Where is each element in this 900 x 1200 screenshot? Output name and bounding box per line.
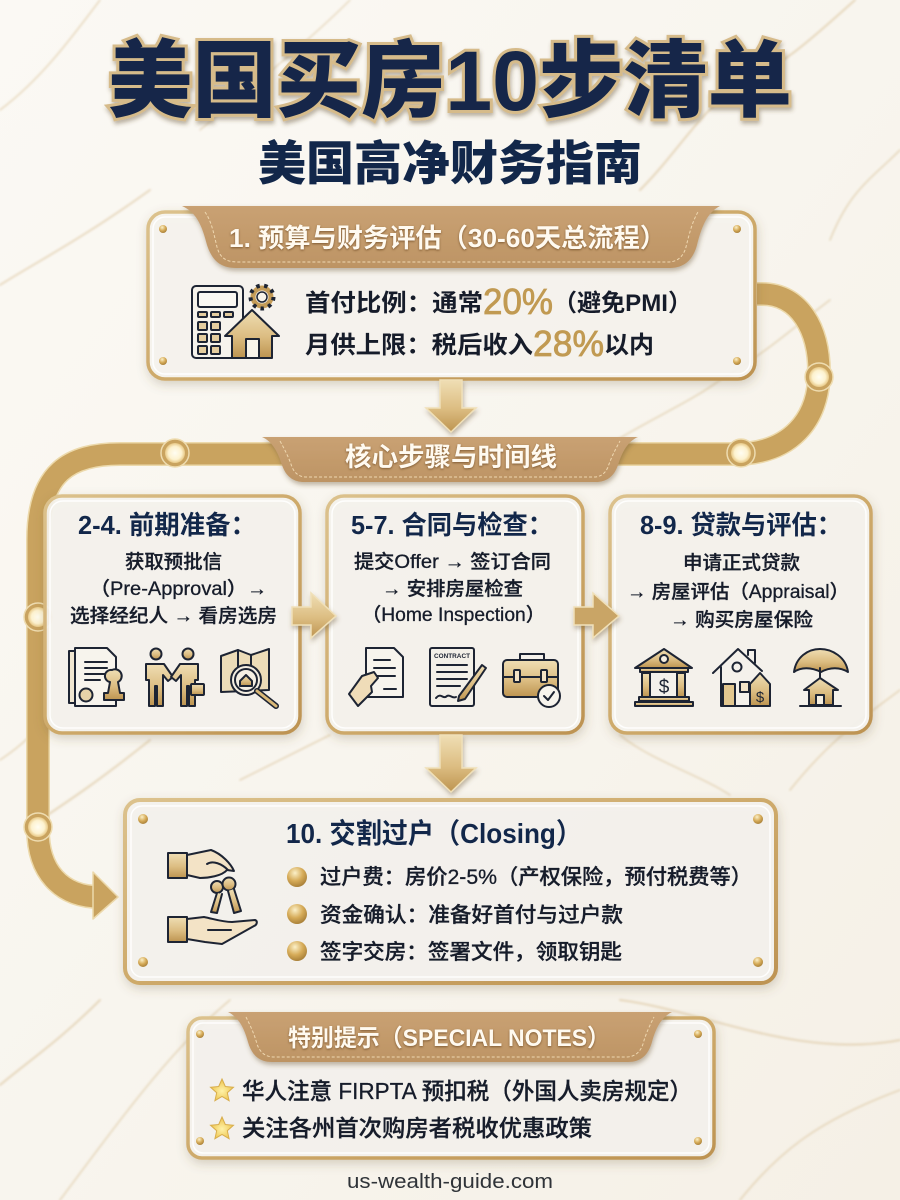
budget text: down payment <box>305 281 692 322</box>
body text: → 购买房屋保险 <box>670 609 813 631</box>
title: 美国买房10步清单 <box>108 34 792 128</box>
icon: house with price tag: $ <box>756 689 765 706</box>
body text: （Home Inspection） <box>362 604 545 626</box>
subtitle: 美国高净财务指南 <box>258 137 642 190</box>
header tab: core steps <box>262 437 638 482</box>
panel: steps 2-4 <box>45 496 300 733</box>
heading: 5-7. 合同与检查： <box>351 510 553 540</box>
budget text: down payment: （避免PMI） <box>553 290 692 317</box>
icon: handshake people <box>146 648 204 706</box>
panel: step 1 budget <box>148 206 755 379</box>
icon: bank <box>635 649 693 706</box>
body text <box>70 551 277 627</box>
heading: 8-9. 贷款与评估： <box>640 510 842 540</box>
arrow: steps 5-7 to 8-9 <box>574 593 619 638</box>
arrow: down to core steps <box>426 380 476 432</box>
header tab: step 1 <box>182 206 720 268</box>
header tab: special notes <box>228 1012 672 1062</box>
body text <box>627 552 849 631</box>
body text: 选择经纪人 → 看房选房 <box>70 605 277 627</box>
arrow: steps 2-4 to 5-7 <box>292 593 336 638</box>
bullet list: 资金确认：准备好首付与过户款 <box>320 904 623 927</box>
icon: signed contract with pen: CONTRACT <box>434 653 470 660</box>
arrow: down to closing <box>426 735 476 792</box>
arrow: into closing panel <box>93 872 118 919</box>
budget text: down payment: 首付比例：通常 <box>305 290 483 317</box>
icon: briefcase with check <box>503 654 560 707</box>
budget text: monthly payment: 以内 <box>604 332 654 359</box>
icon: umbrella over house <box>794 649 848 706</box>
icon: signed contract with pen <box>430 648 486 706</box>
connector: gold timeline path <box>38 294 819 897</box>
bullet list: 过户费：房价2-5%（产权保险，预付税费等） <box>320 866 752 889</box>
icon: certificate and stamp <box>69 648 124 706</box>
budget text: down payment: 20% <box>483 281 553 322</box>
node markers on timeline <box>24 363 833 841</box>
icon: calculator with gear and house <box>192 286 279 358</box>
note 1: 华人注意 FIRPTA 预扣税（外国人卖房规定） <box>242 1078 692 1104</box>
heading: 10. 交割过户（Closing） <box>286 818 582 849</box>
body text: 申请正式贷款 <box>683 552 800 574</box>
budget text: monthly payment: 28% <box>533 323 604 364</box>
header tab: step 1: 1. 预算与财务评估（30-60天总流程） <box>229 223 666 253</box>
body text: （Pre-Approval）→ <box>90 578 267 600</box>
budget text: monthly payment: 月供上限：税后收入 <box>305 332 533 359</box>
bullet list <box>287 866 752 964</box>
body text <box>354 551 551 626</box>
icon: map with magnifier <box>221 649 276 706</box>
budget text: monthly payment <box>305 323 654 364</box>
body text: 提交Offer → 签订合同 <box>354 551 551 573</box>
icon: bank: $ <box>659 677 670 698</box>
panel: step 10 closing <box>125 800 776 983</box>
header tab: special notes: 特别提示（SPECIAL NOTES） <box>288 1025 610 1052</box>
heading: 2-4. 前期准备： <box>78 510 256 540</box>
panel: steps 5-7 <box>327 496 583 733</box>
icon: house with price tag <box>713 649 770 706</box>
body text: 获取预批信 <box>125 551 222 573</box>
body text: → 房屋评估（Appraisal） <box>627 581 849 603</box>
bullet list: 签字交房：签署文件，领取钥匙 <box>320 941 622 964</box>
note 2: 关注各州首次购房者税收优惠政策 <box>242 1115 592 1141</box>
header tab: core steps: 核心步骤与时间线 <box>345 442 557 472</box>
panel: steps 8-9 <box>610 496 871 733</box>
icon: hands passing keys <box>168 850 257 944</box>
footer: website: us-wealth-guide.com <box>347 1171 553 1193</box>
icon: hand holding document <box>349 648 403 706</box>
body text: → 安排房屋检查 <box>382 578 523 600</box>
panel: special notes <box>188 1012 714 1158</box>
